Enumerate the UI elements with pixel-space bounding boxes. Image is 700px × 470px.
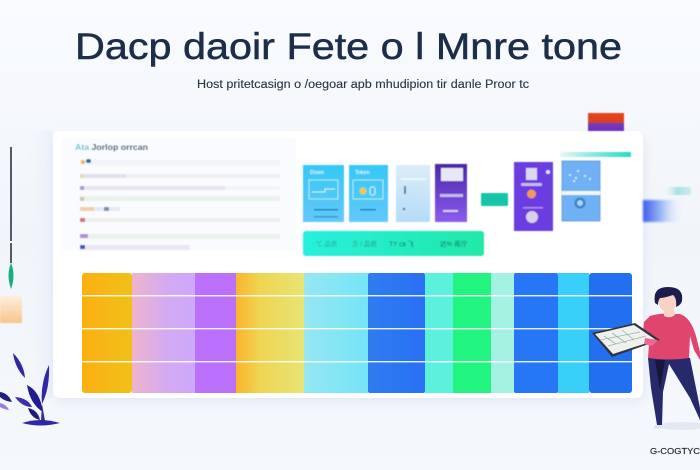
hand bbox=[644, 338, 658, 346]
card 2 bbox=[349, 165, 388, 222]
mint legend bar: TY ㎝ 飞 bbox=[389, 240, 414, 248]
list heading: Ata Jorlop orrcan bbox=[75, 142, 148, 152]
mint legend bar: 达% 南泞 bbox=[440, 239, 468, 248]
card 6 bbox=[562, 161, 600, 221]
title: Dacp daoir Fete o l Mnre tone bbox=[75, 26, 622, 67]
footer label: G-COGTYC bbox=[650, 447, 700, 456]
card 2: Token bbox=[355, 170, 370, 176]
column: pink lilac bbox=[132, 273, 195, 393]
shoe bbox=[653, 425, 663, 429]
legs bbox=[648, 358, 700, 425]
panel: list card bbox=[62, 138, 296, 251]
shadow bbox=[658, 422, 700, 430]
card 3 bbox=[396, 165, 430, 222]
floating blue blob bbox=[643, 200, 683, 222]
column: aqua bbox=[425, 273, 453, 393]
subtitle: Host pritetcasign o /oegoar apb mhudipion tir danle Proor tc bbox=[197, 79, 529, 91]
floating teal tag bbox=[663, 187, 691, 195]
column: blue 3 bbox=[589, 273, 632, 393]
card 1: Down bbox=[310, 170, 324, 176]
column: amber bbox=[82, 273, 132, 393]
torso bbox=[643, 314, 700, 360]
column: blue 2 bbox=[514, 273, 558, 393]
card 4 bbox=[435, 164, 467, 222]
column: blue bbox=[368, 273, 425, 393]
orange gradient block bbox=[0, 296, 22, 323]
column: sky bbox=[304, 273, 368, 393]
column: pale mint bbox=[491, 273, 514, 393]
plant illustration bbox=[0, 353, 60, 426]
red tab bbox=[588, 113, 624, 131]
mint legend bar: 方 / 品质 bbox=[352, 239, 377, 248]
hair bbox=[655, 287, 682, 307]
illustration: person with tablet bbox=[592, 287, 700, 430]
card 1 bbox=[303, 165, 344, 222]
neck and face bbox=[659, 292, 677, 317]
column: green bbox=[453, 273, 491, 393]
column: violet bbox=[195, 273, 236, 393]
top gradient strip bbox=[560, 152, 631, 157]
card 5 bbox=[514, 162, 553, 231]
small teal tag bbox=[481, 193, 508, 206]
mint legend bar bbox=[303, 231, 484, 256]
list rows bbox=[80, 159, 280, 250]
column: yellow bbox=[236, 273, 304, 393]
vertical pin decoration bbox=[8, 147, 14, 289]
column: cyan bbox=[558, 273, 589, 393]
mint legend bar: · ℃ 品质 bbox=[312, 239, 338, 248]
main panel bbox=[53, 131, 643, 398]
panel: dashboard cards bbox=[303, 152, 631, 256]
colour matrix chart bbox=[82, 273, 632, 393]
tablet bbox=[592, 323, 660, 357]
